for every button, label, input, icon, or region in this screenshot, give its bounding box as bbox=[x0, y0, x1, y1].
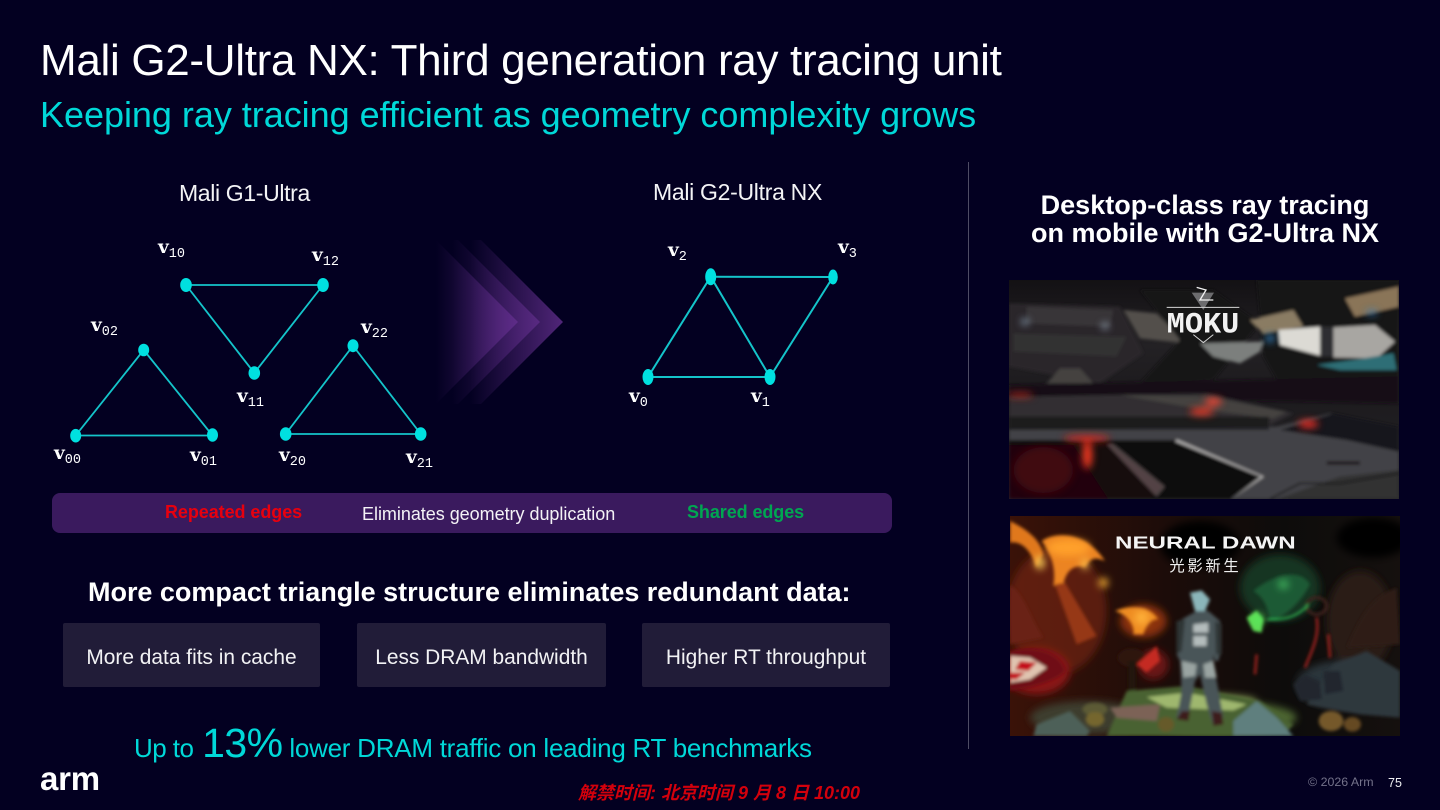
triangle 1 bbox=[157, 237, 339, 411]
heading: desktop-class bbox=[1031, 190, 1379, 248]
triangle 0: v bbox=[54, 443, 65, 464]
box: DRAM bandwidth: Less DRAM bandwidth bbox=[375, 646, 588, 668]
diagram: G2-Ultra NX shared-edge triangles: 3 bbox=[849, 247, 857, 262]
box: throughput bbox=[642, 623, 890, 687]
logo: arm: arm bbox=[40, 760, 100, 797]
image: NEURAL DAWN game scene bbox=[1010, 516, 1400, 736]
image: MOKU game scene bbox=[1009, 280, 1399, 499]
box: throughput: Higher RT throughput bbox=[666, 646, 866, 668]
heading: compact triangle structure: More compact triangle structure eliminates redundant data: bbox=[88, 577, 851, 607]
embargo notice: 解禁时间: 北京时间 9 月 8 日 10:00 bbox=[578, 783, 860, 803]
heading: Mali G1-Ultra: Mali G1-Ultra bbox=[179, 180, 310, 206]
diagram: G2-Ultra NX shared-edge triangles: v bbox=[668, 240, 679, 261]
triangle 2: v bbox=[406, 447, 417, 468]
triangle 2: v bbox=[361, 317, 372, 338]
triangle 2: 22 bbox=[372, 327, 388, 342]
triangle 1: 12 bbox=[323, 255, 339, 270]
triangle 1: v bbox=[312, 245, 323, 266]
box: cache bbox=[63, 623, 320, 687]
panel: comparison band bbox=[52, 493, 892, 533]
triangle 2 bbox=[278, 317, 433, 472]
triangle 0: 02 bbox=[102, 325, 118, 340]
diagram: G1-Ultra separate triangles bbox=[54, 237, 433, 472]
diagram: G2-Ultra NX shared-edge triangles: v bbox=[751, 386, 762, 407]
box: cache: More data fits in cache bbox=[86, 646, 297, 668]
label: shared edges: Shared edges bbox=[687, 502, 804, 522]
arrow: purple chevrons bbox=[444, 240, 563, 404]
heading: desktop-class: Desktop-class ray tracing bbox=[1041, 190, 1369, 220]
triangle 0: v bbox=[190, 445, 201, 466]
triangle 0: v bbox=[91, 315, 102, 336]
triangle 2: 21 bbox=[417, 457, 433, 472]
title: Mali G2-Ultra NX: Third generation ray tracing unit bbox=[40, 36, 1002, 85]
diagram: G2-Ultra NX shared-edge triangles: 1 bbox=[762, 396, 770, 411]
NEURAL DAWN title: NEURAL DAWN bbox=[1115, 532, 1296, 552]
label: repeated edges: Repeated edges bbox=[165, 502, 302, 522]
triangle 1: v bbox=[158, 237, 169, 258]
diagram: G2-Ultra NX shared-edge triangles: v bbox=[629, 386, 640, 407]
Chinese subtitle: 光影新生 bbox=[1169, 558, 1241, 575]
heading: Mali G2-Ultra NX: Mali G2-Ultra NX bbox=[653, 179, 822, 205]
triangle 0: 00 bbox=[65, 453, 81, 468]
triangle 0: 01 bbox=[201, 455, 217, 470]
copyright: © 2026 Arm bbox=[1308, 775, 1374, 789]
triangle 2: v bbox=[279, 445, 290, 466]
triangle 1: 10 bbox=[169, 247, 185, 262]
divider bbox=[968, 162, 969, 749]
label: eliminates duplication: Eliminates geometry duplication bbox=[362, 504, 615, 524]
triangle 0 bbox=[53, 315, 218, 470]
diagram: G2-Ultra NX shared-edge triangles: v bbox=[838, 237, 849, 258]
diagram: G2-Ultra NX shared-edge triangles: 0 bbox=[640, 396, 648, 411]
diagram: G2-Ultra NX shared-edge triangles bbox=[628, 237, 857, 411]
heading: desktop-class: on mobile with G2-Ultra NX bbox=[1031, 218, 1379, 248]
callout: 13% lower DRAM traffic: Up to 13% lower DRAM traffic on leading RT benchmarks bbox=[134, 720, 812, 766]
box: DRAM bandwidth bbox=[357, 623, 606, 687]
triangle 1: v bbox=[237, 386, 248, 407]
triangle 1: 11 bbox=[248, 396, 264, 411]
page number: 75 bbox=[1388, 776, 1402, 790]
diagram: G2-Ultra NX shared-edge triangles: 2 bbox=[679, 250, 687, 265]
MOKU logo bbox=[1167, 287, 1239, 343]
MOKU logo: MOKU bbox=[1167, 308, 1239, 341]
triangle 2: 20 bbox=[290, 455, 306, 470]
character bbox=[1177, 590, 1223, 726]
subtitle: Keeping ray tracing efficient as geometry complexity grows bbox=[40, 94, 976, 135]
